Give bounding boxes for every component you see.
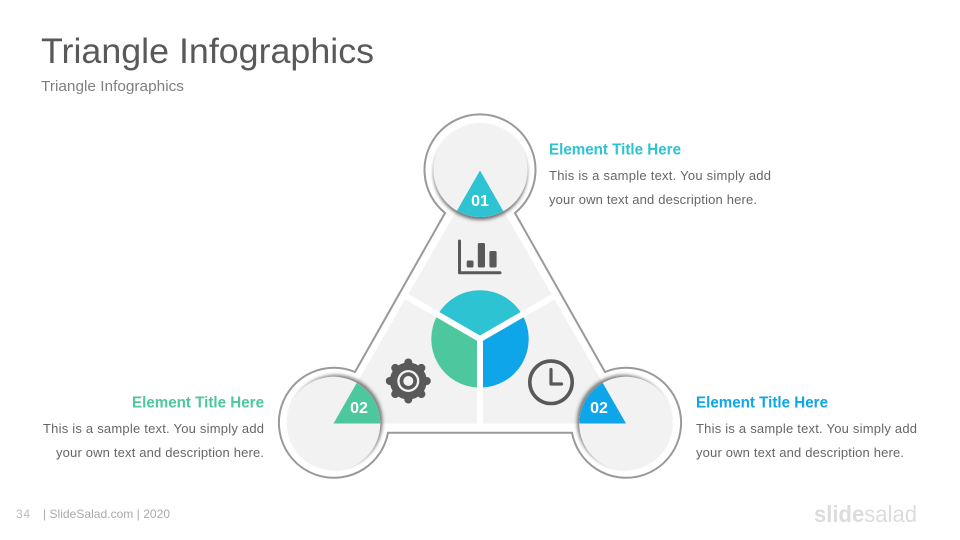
white dividers — [404, 295, 556, 425]
node 01: top circle: 01 — [471, 193, 489, 210]
text block: left element: This is a sample text. You simply add — [43, 421, 264, 436]
text block: top element: your own text and description here. — [549, 192, 757, 207]
triangle diagram — [279, 114, 681, 478]
text block: right element: Element Title Here — [696, 394, 828, 412]
footer: credit: | SlideSalad.com | 2020 — [43, 507, 170, 521]
centre pie: three segments — [431, 290, 529, 388]
text block: top element: Element Title Here — [549, 142, 681, 158]
icon: gear — [390, 362, 427, 400]
node 01: top circle — [431, 123, 530, 222]
node 02: right circle: 02 — [590, 400, 608, 417]
node 02: left circle: 02 — [350, 400, 368, 417]
text block: right element — [696, 394, 917, 460]
title: Triangle Infographics — [41, 32, 374, 71]
text block: right element: This is a sample text. You simply add — [696, 421, 917, 436]
segment: blue right — [480, 315, 529, 388]
outline: triangle with corner circles — [279, 114, 681, 478]
logo: slidesalad wordmark: slidesalad — [814, 501, 917, 527]
footer: page number: 34 — [16, 507, 30, 521]
segment: teal top — [438, 290, 522, 339]
text block: top element: This is a sample text. You simply add — [549, 168, 771, 183]
text block: right element: your own text and description here. — [696, 445, 904, 460]
text block: left element: Element Title Here — [132, 394, 264, 412]
icon: clock — [530, 361, 572, 403]
icon: bar chart — [460, 241, 500, 273]
node 02: left circle — [287, 372, 385, 470]
text block: top element — [549, 142, 771, 207]
grey inner triangle — [334, 170, 626, 424]
node 02: right circle — [574, 372, 672, 470]
subtitle: Triangle Infographics — [41, 79, 184, 95]
text block: left element — [43, 394, 264, 460]
text block: left element: your own text and description here. — [56, 445, 264, 460]
segment: green left — [431, 315, 480, 388]
